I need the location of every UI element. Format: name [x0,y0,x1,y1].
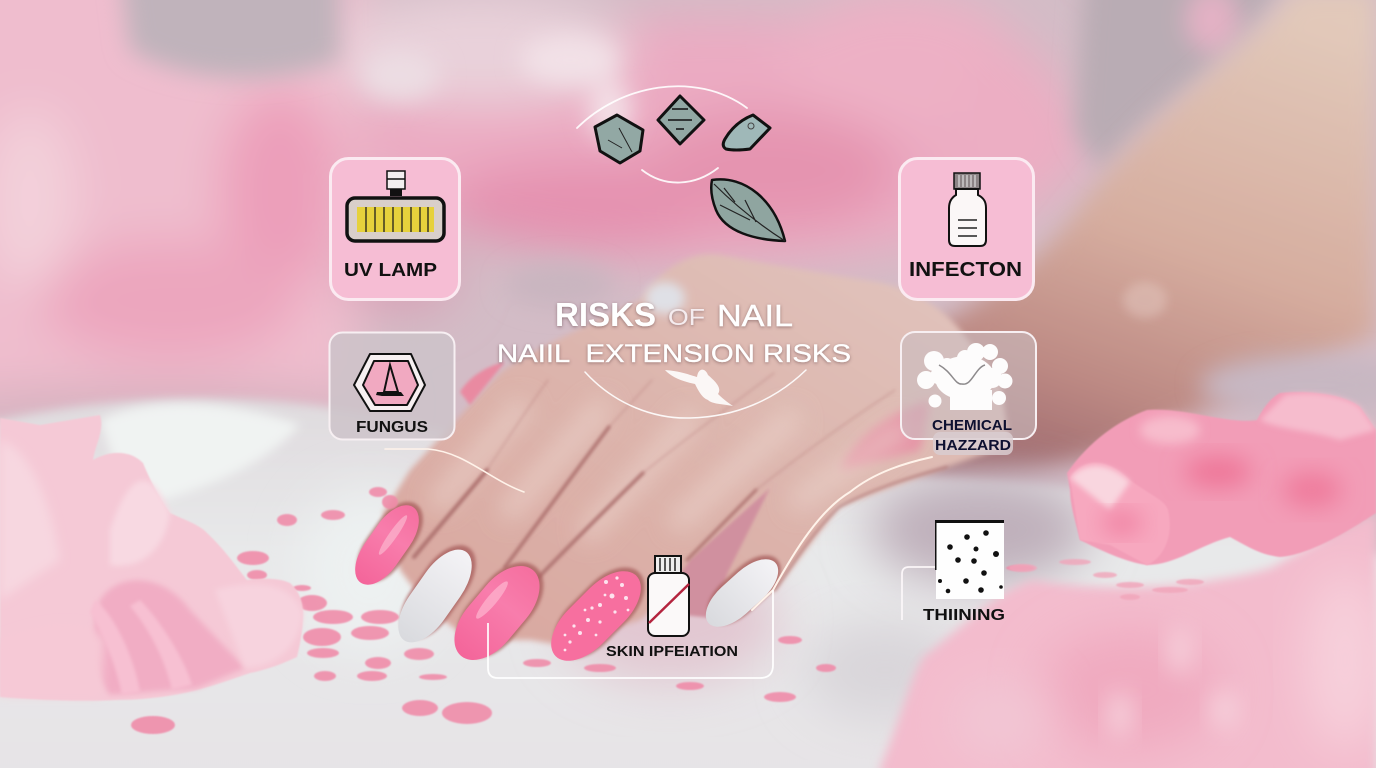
out of focus grey backdrop and pale petals [120,0,1290,307]
arc under title with floral ornament [585,370,806,418]
flower: right [1067,392,1376,565]
arm [880,0,1376,476]
panel: UV lamp [330,158,460,300]
icon: warning hexagon [354,354,425,411]
panel: chemical hazard [901,332,1036,455]
table cloth [0,399,1376,768]
title: NAIL [717,298,793,333]
icon: UV lamp [347,171,444,241]
label: fungus: FUNGUS [356,419,428,436]
icon: grey diamond [658,96,704,144]
icon: grey stone [595,115,643,163]
flower: bottom left [0,415,303,701]
label: UV lamp: UV LAMP [344,259,437,280]
flower: bottom right [880,513,1376,768]
panel: infection [900,158,1034,300]
top arc ornaments [577,86,747,183]
label: skin irritation: SKIN IPFEIATION [606,644,738,660]
title: RISKS [555,296,656,333]
icon: leaf [711,179,785,241]
label: infection: INFECTON [909,259,1022,281]
water droplets on table [1009,559,1204,600]
petals scattered on table [131,487,1034,734]
title: NAIIL EXTENSION RISKS [497,340,851,368]
nails [345,492,791,673]
icon: white coral splash [917,343,1012,410]
panel: thinning [902,520,1005,624]
label: chemical hazard: HAZZARD [935,437,1011,454]
title [497,296,851,368]
icon: dotted skin square [935,520,1004,599]
title: OF [668,304,705,330]
icon: nail tip [723,115,770,150]
icon: bottle [949,173,986,246]
label: thinning: THIINING [923,607,1005,624]
hand and fingers [383,254,1010,645]
panel: skin irritation [488,556,773,678]
connector lines [385,449,932,610]
panel: fungus [330,332,454,440]
icon: crossed bottle [648,556,689,636]
label: chemical hazard: CHEMICAL [932,417,1012,434]
